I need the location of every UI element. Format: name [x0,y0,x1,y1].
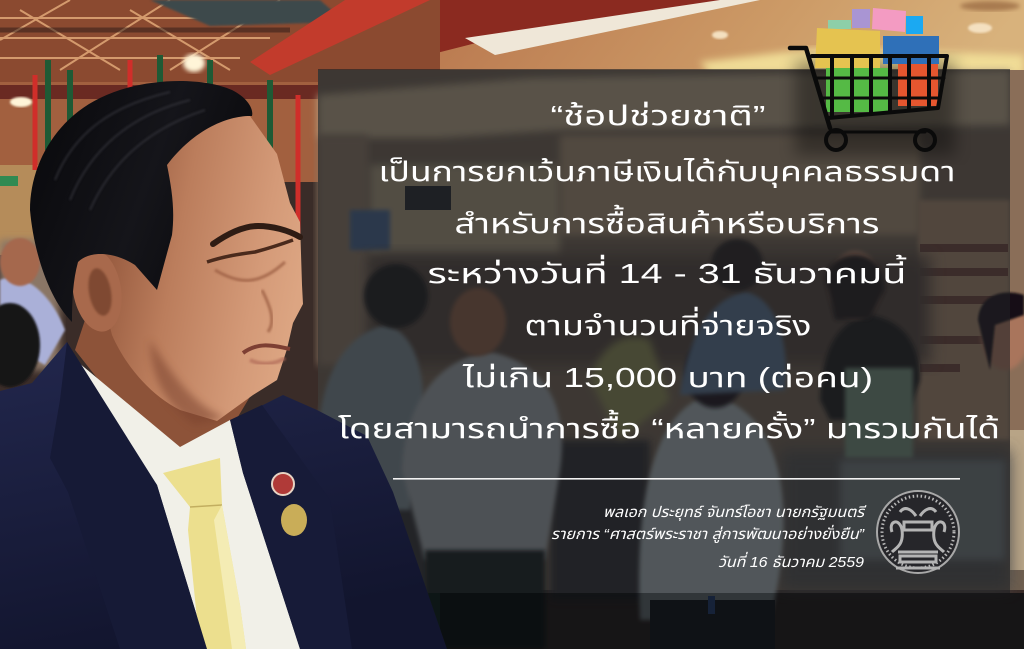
text block: attribution: พลเอก ประยุทธ์ จันทร์โอชา นายกรัฐมนตรี [603,504,867,521]
shirt [67,353,300,649]
jacket right lapel [230,405,352,649]
suit [0,342,447,649]
hair [30,81,252,322]
tie [163,458,246,649]
left truss and red canopy [0,0,440,255]
mall interior [318,70,1024,600]
pins [272,473,307,536]
text block: main message: เป็นการยกเว้นภาษีเงินได้กับบุคคลธรรมดา [378,156,956,188]
heading: campaign name: “ช้อปช่วยชาติ” [550,100,766,131]
facial features [150,226,300,425]
face [104,113,303,421]
panel: translucent dark overlay [318,69,1010,593]
text block: main message: ระหว่างวันที่ 14 - 31 ธันวาคมนี้ [428,254,906,289]
text block: attribution: วันที่ 16 ธันวาคม 2559 [718,551,865,571]
text block: attribution [551,504,867,571]
icon: shopping cart with boxes [790,8,955,155]
text block: main message: ไม่เกิน 15,000 บาท (ต่อคน) [462,362,873,393]
politician portrait [0,81,447,649]
icon: government seal [877,491,959,573]
hair highlights [55,92,205,210]
shoppers [318,239,1024,649]
text block: main message: สำหรับการซื้อสินค้าหรือบริการ [454,204,880,239]
text block: attribution: รายการ “ศาสตร์พระราชา สู่การพัฒนาอย่างยั่งยืน” [551,524,865,543]
cart basket frame [790,48,947,150]
neck [75,300,260,450]
text block: main message: โดยสามารถนำการซื้อ “หลายครั้ง” มารวมกันได้ [338,409,1000,444]
text block: main message: ตามจำนวนที่จ่ายจริง [524,306,812,341]
text block: main message [338,156,1000,444]
mall ceiling [270,0,1024,80]
jacket left lapel [50,342,207,649]
ear [66,244,128,336]
